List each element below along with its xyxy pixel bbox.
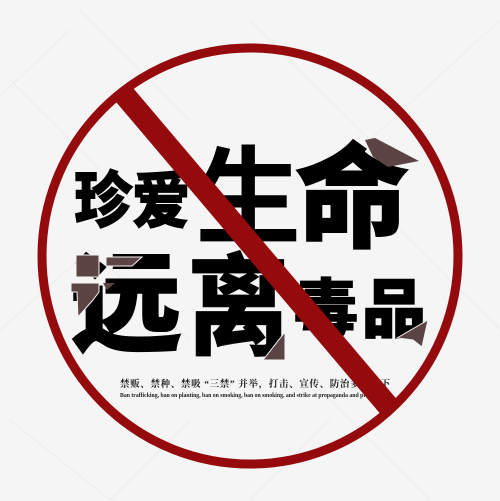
heading: 远离 (70, 243, 289, 370)
icon: brown roof accent (365, 138, 419, 167)
heading: 远离: 远 (70, 243, 182, 367)
heading: 生命 (195, 137, 409, 263)
text: English slogan: Ban trafficking, ban on planting, ban on smoking, ban on smoking, and strike at propaganda and prevention. (120, 392, 388, 399)
heading: 珍爱: 珍爱 (74, 166, 190, 235)
heading: 毒品 (294, 274, 426, 346)
heading: 生命: 生 (195, 140, 301, 258)
icon: brown accent on 离 (263, 332, 285, 360)
icon: brown accent on 品 (397, 320, 428, 347)
icon: brown accents on 远 (71, 255, 142, 317)
heading: 远离: 离 (187, 247, 289, 370)
prohibition sign: red slash (116, 88, 396, 413)
text: Chinese slogan: 禁贩、禁种、禁吸 “三禁” 并举，打击、宣传、防治多管齐下 (120, 378, 390, 390)
heading: 毒品: 毒 (294, 274, 358, 346)
prohibition sign: red ring (42, 48, 458, 464)
heading: 毒品: 品 (362, 274, 426, 346)
heading: 生命: 命 (295, 137, 409, 263)
